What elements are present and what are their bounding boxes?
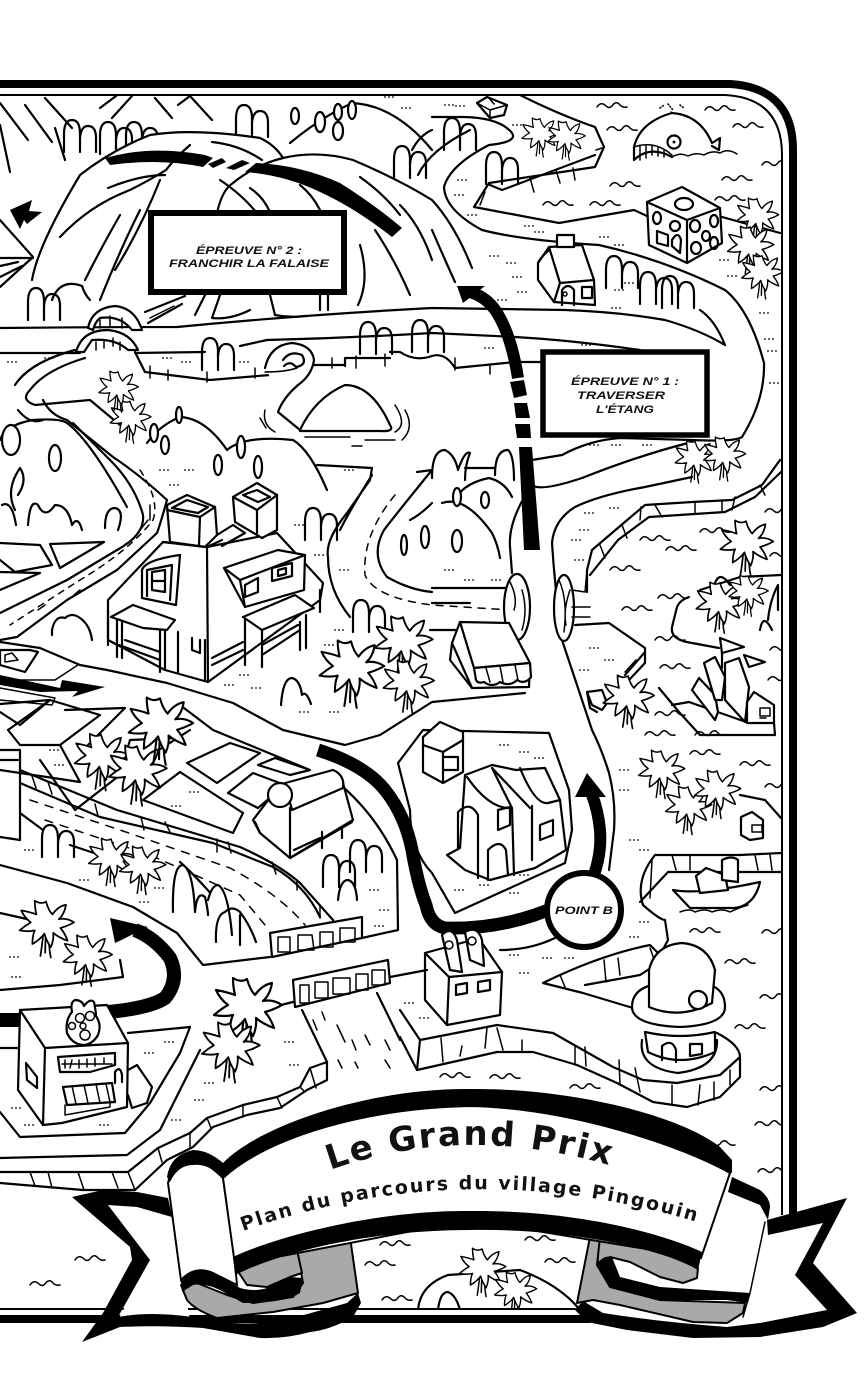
palms and awning shop — [281, 600, 531, 714]
callout: épreuve 1: L'ÉTANG — [596, 403, 655, 416]
long diagonal road — [20, 770, 333, 945]
banner title text: Plan du parcours du village Pingouin — [240, 1174, 696, 1230]
callout: épreuve 2: FRANCHIR LA FALAISE — [169, 258, 330, 270]
banner left tail — [72, 1190, 361, 1342]
store with mascot — [0, 1000, 327, 1190]
left road and hills — [0, 350, 337, 640]
left edge tent — [0, 220, 33, 287]
mountain and cliffs — [0, 93, 472, 320]
banner main panel — [223, 1089, 732, 1275]
swan boat in pond — [260, 343, 409, 446]
palms beside dice — [728, 198, 784, 299]
south island — [417, 1248, 578, 1308]
right road and cliffs — [575, 437, 781, 728]
banner right tail — [575, 1192, 857, 1338]
banner title text: Le Grand Prix — [325, 1120, 613, 1169]
arrow: route across the pond — [457, 286, 540, 550]
point B circle: POINT B — [555, 905, 613, 917]
lower road with sign and arrow — [0, 642, 525, 745]
upper roads and pond — [0, 296, 725, 382]
arrow near store — [0, 918, 174, 1020]
arrow: towards the left — [10, 200, 42, 229]
mansion — [108, 483, 323, 682]
land parcels — [0, 700, 310, 840]
island with cliff and palms, top — [444, 95, 780, 233]
point B circle — [547, 873, 621, 947]
bridges and south-west land — [0, 865, 427, 1083]
whale — [634, 104, 737, 160]
book houses — [423, 722, 566, 880]
palm island with ship — [639, 520, 781, 835]
banner right roll band — [728, 1177, 770, 1317]
winding road and top-right roads — [412, 117, 764, 870]
title banner — [72, 1089, 857, 1342]
road beside route — [323, 787, 398, 938]
coast south-east and lighthouse — [400, 905, 740, 1107]
banner grey folds left — [180, 1237, 358, 1318]
central wedge road — [317, 450, 590, 641]
callout: épreuve 1: ÉPREUVE N° 1 : — [571, 375, 679, 388]
waves: sea texture — [20, 103, 800, 1340]
callout: épreuve 2 — [151, 213, 344, 292]
cliff-side marker arrow — [105, 151, 402, 237]
callout: épreuve 2: ÉPREUVE N° 2 : — [196, 244, 302, 257]
harbor and steamboat — [640, 795, 781, 912]
callout: épreuve 1 — [543, 352, 707, 435]
banner title text — [240, 1120, 696, 1230]
callout: épreuve 1: TRAVERSER — [577, 390, 665, 402]
dice house — [647, 187, 722, 263]
dots: land texture — [7, 96, 779, 1126]
small house — [538, 235, 694, 308]
central factory — [425, 930, 502, 1025]
cottage — [75, 697, 353, 858]
banner left roll — [167, 1150, 237, 1285]
banner grey folds right — [577, 1235, 750, 1323]
thick route arrow and point B — [318, 730, 621, 947]
